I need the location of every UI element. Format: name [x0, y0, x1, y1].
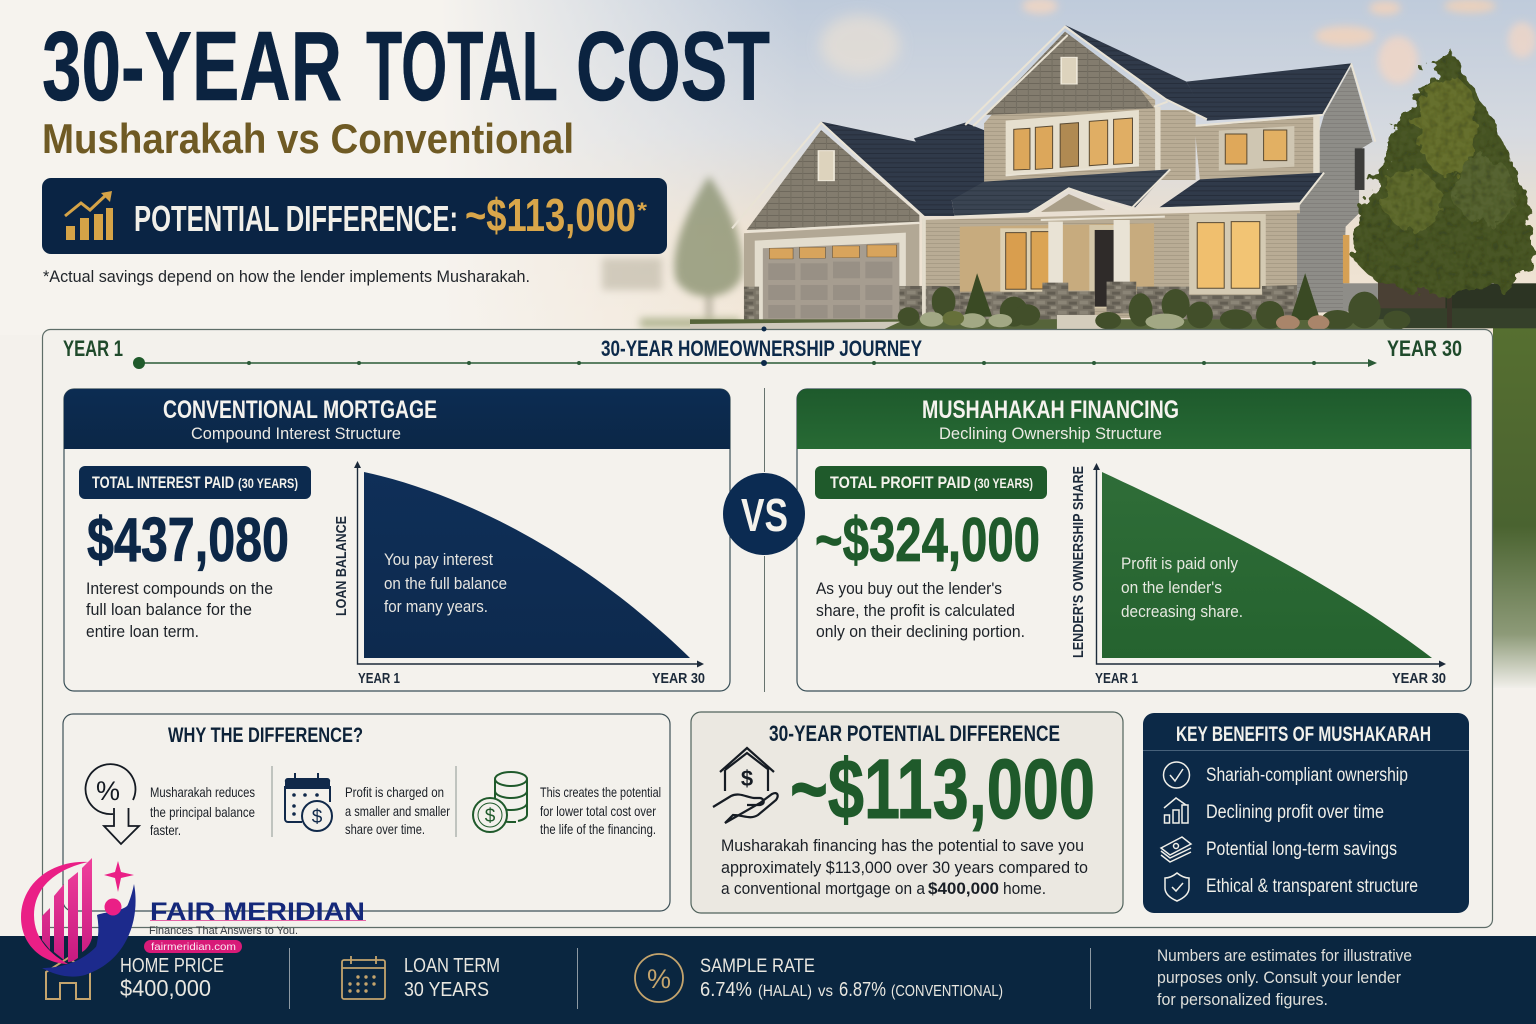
- porch window and door: [960, 225, 1130, 320]
- home price: HOME PRICE: [120, 955, 224, 977]
- disclaimer: [1157, 946, 1412, 1009]
- panel: key benefits: Potential long-term savings: [1206, 839, 1397, 860]
- label pill: [815, 466, 1047, 499]
- icon: house with dollar in hand: [713, 748, 778, 823]
- sample rate: 6.74%: [700, 979, 752, 1001]
- right side wall: [1300, 63, 1378, 313]
- house illustration: [690, 25, 1536, 333]
- potential difference banner: [42, 178, 667, 254]
- reason three: for lower total cost over: [540, 803, 656, 819]
- banner amount: *: [637, 198, 648, 223]
- stone foundation: [1137, 285, 1297, 320]
- label pill: (30 YEARS): [974, 475, 1033, 491]
- journey timeline: YEAR 1: [63, 336, 123, 361]
- center upper window: [1006, 110, 1139, 176]
- panel: key benefits: Shariah-compliant ownership: [1206, 765, 1408, 786]
- reason two: share over time.: [345, 821, 425, 837]
- garage gable wall: [747, 130, 919, 230]
- chart: lender's ownership share declining: Profit is paid only: [1121, 554, 1238, 573]
- icon: percent circle: [635, 954, 683, 1002]
- journey timeline: [63, 326, 1462, 369]
- lawn and driveway: [690, 315, 1402, 333]
- reason three: the life of the financing.: [540, 821, 656, 837]
- icon: percent circle: %: [647, 964, 671, 994]
- label pill: TOTAL INTEREST PAID: [92, 473, 234, 492]
- description: share, the profit is calculated: [816, 601, 1015, 620]
- panel: key benefits: Declining profit over time: [1206, 802, 1384, 823]
- logo url pill: fairmeridian.com: [151, 941, 236, 953]
- front lower roof right: [1159, 173, 1324, 207]
- home price: [120, 955, 224, 1001]
- icon: calendar with dollar coin: $: [312, 807, 323, 828]
- garage roof: [821, 122, 981, 216]
- heading: 30-YEAR POTENTIAL DIFFERENCE: [769, 721, 1060, 746]
- logo: Fair Meridian: [21, 858, 366, 977]
- reason two: [345, 784, 450, 837]
- center divider with VS badge: VS: [741, 489, 788, 541]
- icon: percent with down arrow: [85, 764, 139, 844]
- icon: coins: [473, 772, 527, 832]
- reason one: [150, 784, 255, 838]
- banner amount: ~$113,000: [465, 189, 636, 241]
- fence and hedge: [1375, 277, 1536, 328]
- heading: KEY BENEFITS OF MUSHAKARAH: [1176, 723, 1431, 746]
- chart: lender's ownership share declining: YEAR 1: [1095, 670, 1138, 687]
- icon: house: [46, 958, 90, 999]
- label pill: (30 YEARS): [238, 475, 298, 491]
- chart: lender's ownership share declining: LENDER'S OWNERSHIP SHARE: [1070, 466, 1087, 658]
- icon: calendar: [342, 956, 385, 999]
- chart: loan balance declining: LOAN BALANCE: [333, 516, 350, 616]
- card header: Declining Ownership Structure: [939, 424, 1162, 443]
- large savings amount: ~$113,000: [790, 742, 1095, 836]
- chart: lender's ownership share declining: YEAR 30: [1392, 670, 1446, 687]
- tree right of the house: [1351, 48, 1533, 328]
- right second floor wall: [1193, 115, 1322, 180]
- chart: lender's ownership share declining: decreasing share.: [1121, 602, 1243, 621]
- savings description: $400,000: [928, 879, 999, 898]
- card header: [64, 389, 730, 449]
- sample rate: (CONVENTIONAL): [891, 983, 1003, 1000]
- icon: calendar with dollar coin: [285, 773, 332, 831]
- label pill: [79, 466, 311, 499]
- icon: percent with down arrow: %: [96, 776, 120, 806]
- footnote: *Actual savings depend on how the lender implements Musharakah.: [43, 267, 530, 286]
- reason two: Profit is charged on: [345, 784, 444, 800]
- icon: coins: $: [485, 806, 496, 827]
- reason two: a smaller and smaller: [345, 803, 450, 819]
- main gable wall: [984, 32, 1196, 183]
- reason one: faster.: [150, 822, 181, 838]
- reason one: the principal balance: [150, 804, 255, 820]
- center divider with VS badge: [723, 388, 805, 692]
- sample rate: [700, 956, 1003, 1001]
- panel: 30-year potential difference: [691, 712, 1123, 913]
- savings description: a conventional mortgage on a: [721, 879, 925, 898]
- sample rate: vs: [818, 983, 833, 1000]
- loan term: 30 YEARS: [404, 979, 489, 1001]
- logo name: FAIR MERIDIAN: [150, 898, 365, 926]
- icon: stack of money: [1161, 837, 1191, 862]
- right block roof: [1186, 63, 1351, 121]
- description: full loan balance for the: [86, 600, 252, 619]
- panel: why the difference: [63, 714, 670, 911]
- journey timeline: 30-YEAR HOMEOWNERSHIP JOURNEY: [601, 336, 922, 361]
- savings description: [721, 836, 1088, 898]
- chart: lender's ownership share declining: on the lender's: [1121, 578, 1222, 597]
- journey timeline: YEAR 30: [1387, 336, 1462, 361]
- right large window: [1189, 214, 1266, 294]
- card header: [797, 389, 1471, 449]
- loan term: [404, 955, 500, 1001]
- description: [86, 579, 273, 641]
- panel: musharakah financing: [797, 389, 1471, 691]
- heading: WHY THE DIFFERENCE?: [168, 724, 363, 747]
- icon: declining bars: [1164, 798, 1188, 823]
- home price: $400,000: [120, 975, 211, 1001]
- disclaimer: purposes only. Consult your lender: [1157, 968, 1401, 987]
- description: Interest compounds on the: [86, 579, 273, 598]
- front lower roof left: [952, 169, 1170, 216]
- icon: gold rising chart: [65, 191, 113, 240]
- title: TOTAL: [366, 11, 558, 121]
- title: 30-YEAR: [42, 11, 342, 121]
- banner label: POTENTIAL DIFFERENCE:: [134, 198, 458, 239]
- total profit amount: ~$324,000: [815, 506, 1040, 575]
- total interest amount: $437,080: [87, 506, 289, 575]
- savings description: home.: [1003, 879, 1046, 898]
- savings description: approximately $113,000 over 30 years compared to: [721, 858, 1088, 877]
- description: only on their declining portion.: [816, 622, 1025, 641]
- sample rate: (HALAL): [758, 983, 812, 1000]
- shrubs: [898, 273, 1410, 330]
- bottom facts bar: [0, 936, 1536, 1024]
- title: [42, 11, 770, 121]
- chart: loan balance declining: for many years.: [384, 597, 488, 616]
- disclaimer: Numbers are estimates for illustrative: [1157, 946, 1412, 965]
- background tree left, hazy: [602, 176, 742, 328]
- panel: conventional mortgage: [64, 389, 730, 691]
- chart: loan balance declining: on the full balance: [384, 574, 507, 593]
- savings description: Musharakah financing has the potential to save you: [721, 836, 1084, 855]
- sample rate: SAMPLE RATE: [700, 956, 815, 977]
- disclaimer: for personalized figures.: [1157, 990, 1328, 1009]
- chart: loan balance declining: YEAR 1: [358, 670, 400, 687]
- panel: key benefits: [1143, 713, 1469, 913]
- lower wall: [922, 210, 1343, 322]
- card header: MUSHAHAKAH FINANCING: [922, 396, 1179, 424]
- logo tagline: Finances That Answers to You.: [149, 925, 298, 937]
- icon: house with dollar in hand: $: [741, 766, 753, 791]
- icon: check circle: [1164, 762, 1190, 788]
- garage lower wall and door: [744, 218, 960, 323]
- loan term: LOAN TERM: [404, 955, 500, 977]
- panel: key benefits: Ethical & transparent structure: [1206, 876, 1418, 897]
- main gable roof: [1065, 25, 1208, 121]
- gable vent: [1061, 57, 1077, 84]
- sample rate: 6.87%: [839, 979, 886, 1001]
- description: entire loan term.: [86, 622, 199, 641]
- reason one: Musharakah reduces: [150, 784, 255, 800]
- reason three: [540, 784, 661, 837]
- columns: [1042, 220, 1136, 314]
- card header: Compound Interest Structure: [191, 424, 401, 443]
- description: As you buy out the lender's: [816, 579, 1002, 598]
- chart: loan balance declining: [333, 461, 705, 687]
- title: COST: [576, 11, 770, 121]
- reason three: This creates the potential: [540, 784, 661, 800]
- logo mark: [21, 858, 136, 977]
- porch gable trim: [954, 188, 1165, 220]
- card header: CONVENTIONAL MORTGAGE: [163, 396, 437, 424]
- description: [816, 579, 1025, 641]
- label pill: TOTAL PROFIT PAID: [830, 473, 971, 492]
- chart: lender's ownership share declining: [1070, 463, 1446, 687]
- back roof: [914, 123, 992, 200]
- main panel: [42, 326, 1492, 928]
- chart: loan balance declining: You pay interest: [384, 550, 493, 569]
- icon: shield check: [1165, 873, 1189, 901]
- chart: loan balance declining: YEAR 30: [652, 670, 705, 687]
- subtitle: Musharakah vs Conventional: [42, 115, 574, 162]
